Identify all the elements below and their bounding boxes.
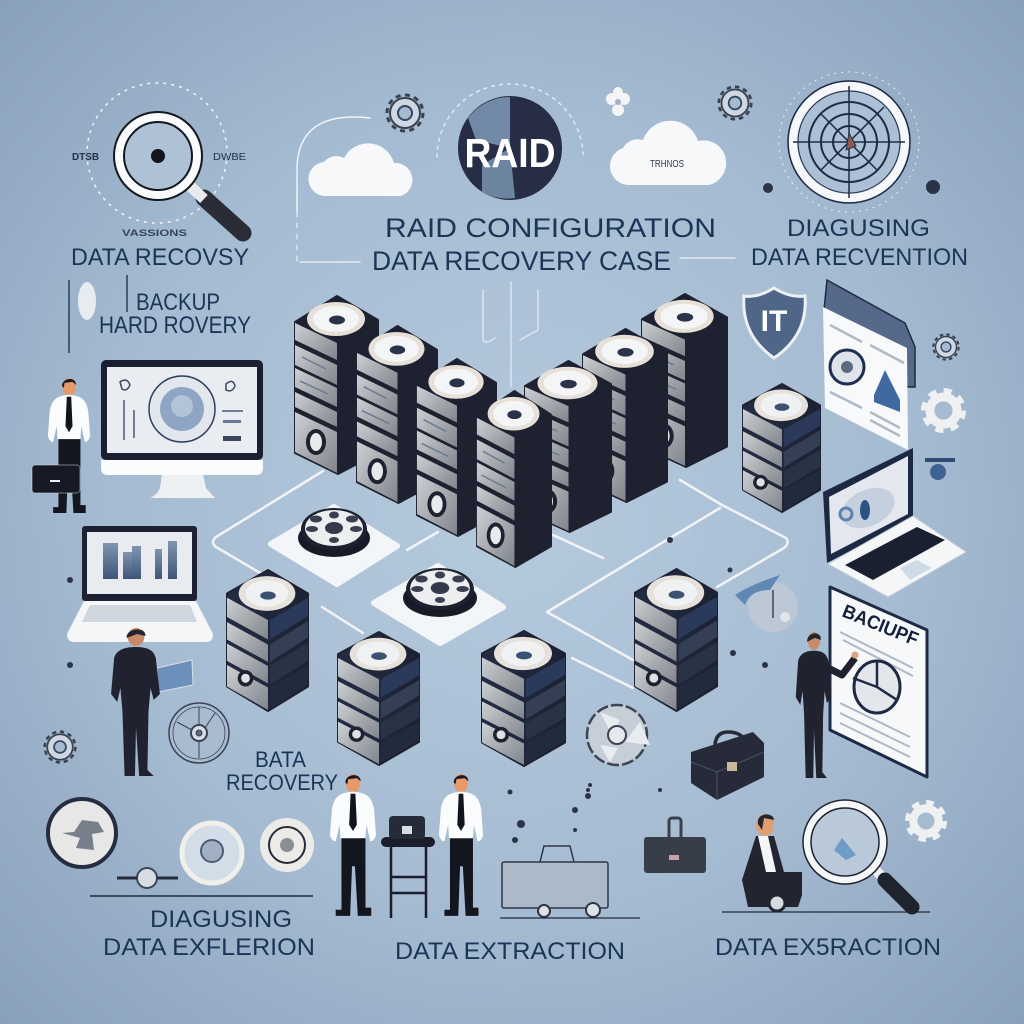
title: DATA RECOVERY CASE — [372, 246, 671, 276]
icon: circle badges bottom left — [48, 799, 314, 896]
icon: magnifying glass bottom right — [803, 800, 912, 907]
icon: cart outline — [500, 846, 930, 918]
icon: cloud left — [308, 143, 412, 196]
icon: IT shield — [744, 288, 805, 358]
title — [372, 213, 716, 276]
label: diagnosing data exfleration: DATA EXFLERION — [103, 934, 315, 961]
icon: gear lower right — [908, 803, 944, 839]
person with briefcase left — [32, 378, 90, 513]
stack lower 4 — [635, 569, 717, 711]
label: diagnosing data recovery top right: DIAGUSING — [787, 215, 930, 242]
label: diagnosing data recovery top right: DATA RECVENTION — [751, 244, 968, 271]
seated person — [742, 814, 802, 911]
icon: radar — [779, 72, 919, 212]
stack lower 2 — [338, 632, 419, 765]
icon: RAID circle: RAID — [464, 130, 556, 176]
tower 3 — [417, 359, 496, 536]
server towers — [295, 294, 727, 567]
tower 6 — [583, 329, 667, 502]
label: backup hard rovery: BACKUP — [136, 289, 220, 316]
man right — [439, 774, 483, 916]
tower 4 — [477, 391, 551, 567]
icon: briefcase center — [644, 818, 706, 873]
icon: RAID circle — [458, 96, 562, 200]
connector lines between drives — [213, 84, 788, 688]
tower 1 — [295, 296, 378, 474]
tower 7 — [642, 294, 727, 467]
panel: backup poster: BACIUPF — [839, 601, 921, 651]
server stacks lower — [227, 569, 717, 766]
icon: document — [823, 280, 915, 450]
label: data exsraction right: DATA EX5RACTION — [715, 934, 941, 961]
icon: magnifying glass top left: VASSIONS — [122, 228, 187, 238]
tower 5 — [525, 361, 611, 532]
stack lower 3 — [482, 631, 565, 766]
icon: briefcase right — [691, 732, 764, 800]
icon: fan — [587, 705, 650, 765]
two men with table — [330, 774, 483, 918]
label: diagnosing data exfleration — [103, 906, 315, 961]
icon: cloud right — [610, 121, 726, 185]
icon: cloud right: TRHNOS — [650, 159, 684, 170]
title: RAID CONFIGURATION — [385, 213, 716, 243]
icon: magnifying glass top left: DTSB — [72, 152, 99, 163]
label: data recovery top left: DATA RECOVSY — [71, 244, 249, 271]
person at poster — [796, 632, 858, 778]
icon: laptop with bars left — [67, 526, 213, 642]
icon: disc on plate 2 — [374, 566, 503, 643]
tower 2 — [357, 326, 437, 503]
icon: disc on plate 1 — [271, 507, 397, 584]
label: backup hard rovery — [69, 275, 251, 353]
person in suit left — [111, 628, 193, 776]
man left — [330, 774, 376, 916]
icon: laptop right — [823, 448, 966, 597]
icon: gears right — [924, 334, 963, 480]
icon: magnifying glass top left: DWBE — [213, 152, 246, 163]
icon: gear top — [387, 95, 423, 131]
icon: gear lower left — [45, 732, 75, 762]
label: bata recovery: RECOVERY — [226, 770, 338, 795]
decorative specks — [67, 180, 940, 843]
label: diagnosing data exfleration: DIAGUSING — [150, 906, 292, 933]
icon: dial — [169, 703, 229, 763]
label: diagnosing data recovery top right — [751, 215, 968, 271]
icon: monitor — [101, 360, 263, 498]
server stack right — [743, 384, 820, 512]
label: bata recovery — [226, 747, 338, 795]
label: bata recovery: BATA — [255, 747, 306, 772]
stack lower 1 — [227, 570, 308, 711]
icon: dark gear top right — [719, 87, 751, 119]
icon: flower — [606, 87, 630, 116]
panel: backup poster — [830, 587, 927, 777]
icon: IT shield: IT — [761, 305, 787, 338]
label: backup hard rovery: HARD ROVERY — [99, 312, 251, 339]
icon: blue wheel shape — [735, 575, 798, 632]
icon: magnifying glass top left — [72, 83, 246, 238]
table with phone — [381, 816, 435, 918]
label: data extraction center: DATA EXTRACTION — [395, 938, 625, 965]
